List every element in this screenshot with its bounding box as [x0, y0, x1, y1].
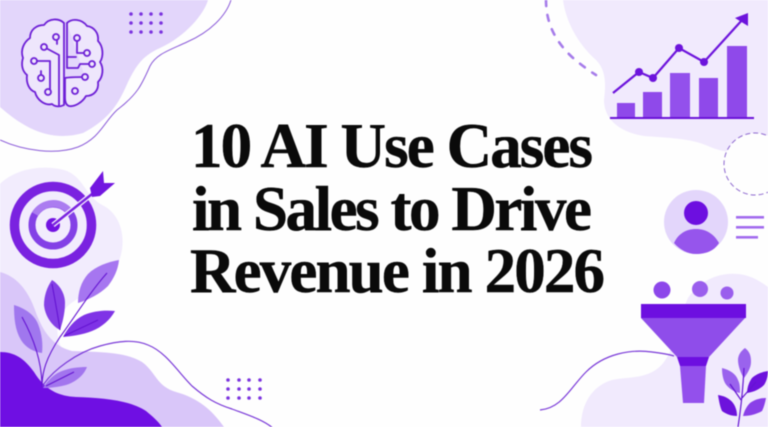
- blob: pale behind target: [0, 168, 123, 352]
- dashed curve: [546, 0, 596, 75]
- blob: medium lavender wave: [0, 272, 224, 427]
- plant stems: [22, 273, 107, 387]
- chart: rising bars with trend line: [610, 13, 754, 119]
- leaf: low: [43, 367, 87, 388]
- dashed circle: [724, 133, 768, 195]
- leaf: far left: [14, 305, 42, 353]
- icon: target with arrow: [14, 171, 115, 264]
- curve: bottom-right outline: [540, 351, 674, 410]
- dot grid: top-left: [129, 12, 163, 34]
- curve: bottom-left outline: [42, 341, 274, 427]
- curve: top-left outline: [0, 0, 231, 151]
- blob: dark purple wave: [0, 352, 162, 427]
- title: [190, 111, 605, 306]
- panel: top-right decoration: [546, 0, 768, 195]
- dot grid: bottom-left: [226, 378, 262, 400]
- leaf: middle right: [63, 311, 115, 337]
- blob: bottom-right pale: [581, 274, 768, 427]
- blob: top-right pale: [563, 0, 768, 152]
- title line 2: in Sales to Drive: [192, 174, 592, 244]
- icon: user profile: [664, 190, 764, 254]
- panel: bottom-left decoration: [0, 168, 274, 427]
- icon: circuit brain: [22, 19, 102, 106]
- icon: small plant: [718, 348, 768, 427]
- title line 3: Revenue in 2026: [190, 236, 605, 306]
- leaf: top centre: [44, 280, 65, 330]
- panel: top-left decoration: [0, 0, 231, 151]
- icon: sales funnel: [641, 281, 746, 403]
- blob: top-left lavender: [0, 0, 208, 136]
- icon: leafy plant: [14, 260, 119, 388]
- panel: bottom-right decoration: [540, 190, 768, 427]
- leaf: top right: [78, 260, 119, 303]
- title line 1: 10 AI Use Cases: [191, 111, 593, 181]
